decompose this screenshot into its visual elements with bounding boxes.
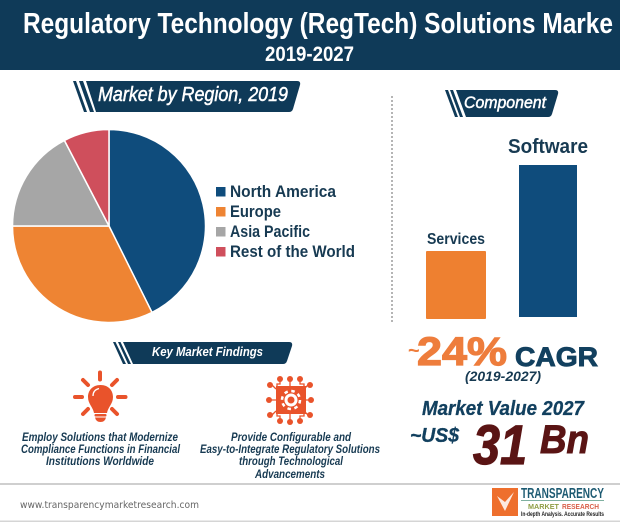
logo: Transparency Market Research: RESEARCH: [562, 502, 599, 511]
stat: market value: [410, 398, 589, 476]
text: finding two: [200, 432, 380, 481]
bar chart: component: [426, 136, 588, 319]
stat: CAGR: CAGR: [515, 342, 598, 372]
legend: Europe: [230, 202, 281, 221]
slice: Europe: [12, 226, 152, 323]
stat: market value: Bn: [540, 418, 589, 462]
slice: North America: [109, 130, 206, 312]
bar: Software: Software: [508, 136, 588, 158]
icon: light bulb: [75, 372, 126, 422]
stat: market value: ~US$: [410, 425, 460, 447]
pie chart: market by region: [12, 129, 206, 323]
heading: Key Market Findings: Key Market Findings: [152, 345, 263, 359]
text: finding two: Advancements: [254, 469, 325, 481]
logo: Transparency Market Research: MARKET: [528, 502, 559, 511]
legend: North America: [230, 182, 336, 201]
stat: market value: 31: [473, 413, 527, 476]
text: finding one: Institutions Worldwide: [46, 456, 155, 468]
stat: CAGR: (2019-2027): [465, 368, 541, 384]
header: title band: [0, 0, 620, 70]
heading: Market by Region: Market by Region, 2019: [98, 84, 288, 106]
legend: [216, 182, 355, 261]
stat: market value: Market Value 2027: [422, 398, 585, 420]
header: title band: 2019-2027: [265, 43, 354, 66]
text: finding two: Easy-to-Integrate Regulatory Solutions: [200, 444, 380, 456]
stat: CAGR: [408, 330, 598, 384]
legend: Rest of the World: [230, 242, 355, 261]
text: finding two: through Technological: [239, 456, 344, 468]
heading: Key Market Findings: [113, 342, 292, 364]
text: finding two: Provide Configurable and: [231, 432, 352, 444]
logo: Transparency Market Research: [492, 486, 604, 518]
bar: Software: [508, 136, 588, 317]
text: finding one: Employ Solutions that Modernize: [22, 432, 179, 444]
icon: circuit chip with gear: [266, 376, 314, 425]
heading: Component: Component: [464, 93, 547, 112]
slice: Asia Pacific: [12, 140, 109, 226]
slice: Rest of the World: [64, 129, 109, 226]
footer: website url: www.transparencymarketresearch.com: [20, 500, 199, 511]
legend: Asia Pacific: [230, 222, 310, 241]
bar: Services: Services: [427, 231, 485, 248]
text: finding one: [21, 432, 181, 468]
stat: CAGR: 24%: [417, 330, 507, 374]
heading: Component: [445, 90, 558, 117]
bar: Services: [426, 231, 486, 319]
text: finding one: Compliance Functions in Financial: [21, 444, 181, 456]
stat: CAGR: ~: [408, 340, 420, 362]
heading: Market by Region: [73, 81, 300, 112]
